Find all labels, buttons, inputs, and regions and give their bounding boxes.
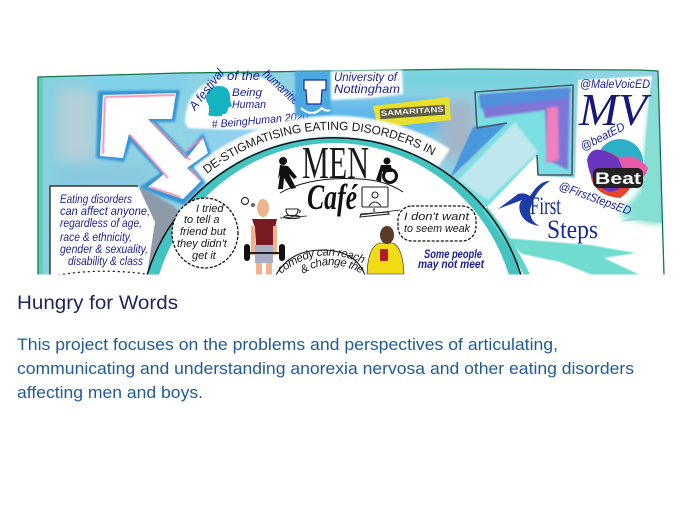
left arrow [96,90,212,205]
hashtag: # BeingHuman 2020 [211,111,310,131]
thought bubble: I tried: get it [192,250,217,262]
logo: MV: MV [578,84,652,135]
text box: eating disorders: Eating disorders [60,194,132,206]
speech bubble: I don't want to seem weak: I don't want [404,211,470,223]
text box: eating disorders: regardless of age, [60,218,142,230]
speech bubble: comedy can reach: & change the [302,258,364,274]
logo: First Steps: Steps [547,215,598,244]
University text: University of [334,70,399,84]
A festival of the humanities: A festival [186,65,228,114]
bottom right white area [484,207,664,274]
University text: Nottingham [334,82,400,96]
speech bubble: I don't want to seem weak [398,206,476,241]
heading: de-stigmatising eating disorders in: DE-STIGMATISING EATING DISORDERS IN [202,122,436,174]
teal streaks [505,78,661,275]
icon: computer [360,187,389,217]
thought bubble: I tried: I tried [196,203,224,215]
festival white blob: of the [227,69,260,83]
Being Human: Being [232,87,263,99]
festival white blob: Human [232,99,266,111]
text: some people: Some people [424,249,482,261]
body text: communicating and understanding anorexia nervosa and other eating disorders [17,359,634,378]
icon: wheelchair user [376,158,396,182]
right white area [486,76,652,240]
speech bubble: I don't want to seem weak: to seem weak [404,223,470,235]
border [38,69,664,275]
handle: beatED: @beatED [578,119,627,154]
text box: eating disorders: gender & sexuality, [60,244,148,256]
arc heading band [194,116,450,183]
icon: walking figure [278,157,297,189]
University of Nottingham logo [295,71,331,116]
logo: First Steps: First [530,193,561,220]
text box: eating disorders [50,186,155,275]
text: some people [418,249,485,271]
Being Human head icon [206,86,232,116]
logo: Beat [587,139,648,198]
text box: eating disorders: disability & class [68,256,143,268]
thought bubble: I tried: to tell a [184,214,219,226]
icon: coffee cup [284,209,300,219]
figure: man with weights [244,199,285,275]
festival white blob: humanities [260,67,306,111]
thought bubble: I tried [172,198,254,268]
title: Cafe: Café [307,177,358,217]
handle: MaleVoicED: @MaleVoicED [580,77,650,91]
logo: First Steps [498,181,598,244]
logo: Beat: Beat [595,169,641,188]
body text: affecting men and boys. [17,383,203,402]
title: MEN: MEN [302,137,369,188]
thought bubble: I tried: friend but [180,226,227,238]
handle: FirstStepsED: @FirstStepsED [557,179,633,218]
Samaritans sign [373,97,451,128]
right arrow [450,85,573,207]
body text: This project focuses on the problems and perspectives of articulating, [17,335,558,354]
circle [147,138,527,275]
illustration banner [37,67,665,274]
Samaritans sign: SAMARITANS [381,105,444,118]
speech bubble: comedy can reach: comedy can reach [278,249,365,273]
thought bubble: I tried: they didn't [177,238,228,250]
University text [331,70,403,100]
text box: eating disorders: can affect anyone, [60,206,150,218]
figure: man in yellow [367,226,404,274]
festival white blob [185,65,310,131]
text: some people: may not meet [418,259,485,271]
text box: eating disorders: race & ethnicity, [60,232,132,244]
body text [17,335,634,402]
heading: Hungry for Words: Hungry for Words [17,292,178,314]
watercolour background [37,68,670,280]
grey wedge [140,186,180,275]
